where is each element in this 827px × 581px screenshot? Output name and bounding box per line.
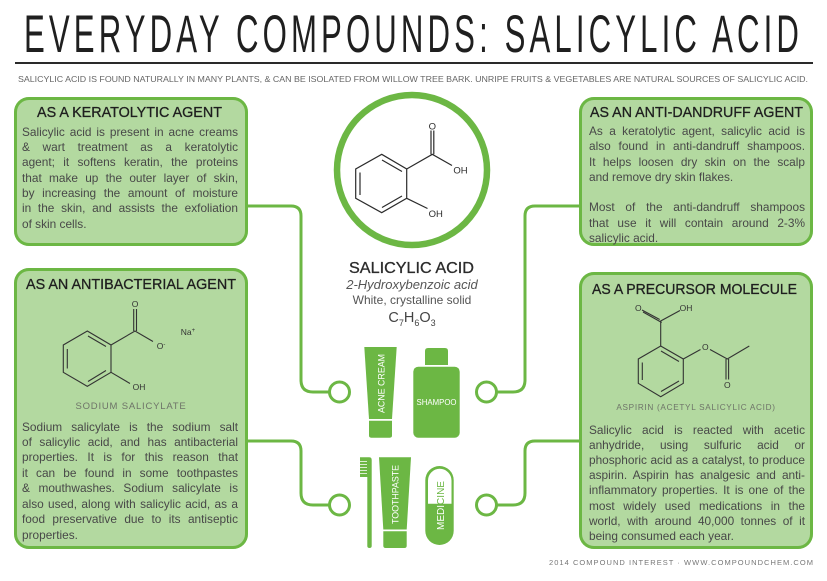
body text: keratolytic: in the skin, and assists the exfoliation: [22, 201, 238, 215]
icon: acne cream tube: [364, 347, 397, 438]
connector: antibacterial panel to toothpaste: [248, 440, 351, 516]
molecule: aspirin: O: [635, 303, 642, 313]
panel: as a precursor molecule: [579, 272, 813, 549]
heading: precursor: AS A PRECURSOR MOLECULE: [592, 281, 797, 298]
icon: medicine capsule: MEDICINE: [435, 481, 447, 530]
icon: toothbrush: [360, 457, 372, 548]
body text: precursor: most widely used medications in the: [589, 499, 805, 513]
molecule: sodium salicylate: O: [132, 299, 139, 309]
body text: keratolytic: Salicylic acid is present in acne creams: [22, 124, 238, 138]
body text: antibacterial: properties.: [22, 528, 78, 542]
body text: antibacterial: [22, 420, 238, 542]
body text: precursor: Salicylic acid is reacted with acetic: [589, 422, 805, 436]
molecule: aspirin: OH: [680, 303, 692, 313]
body text: antibacterial: it can be found in some toothpastes: [22, 466, 238, 480]
intro text: SALICYLIC ACID IS FOUND NATURALLY IN MANY PLANTS, & CAN BE ISOLATED FROM WILLOW TREE BARK. UNRIPE FRUITS & VEGETABLES ARE NATURAL SOURCES OF SALICYLIC ACID.: [18, 74, 808, 84]
icon: medicine capsule: [425, 466, 454, 545]
body text: anti-dandruff: also found in anti-dandruff shampoos.: [589, 139, 805, 153]
systematic name: 2-Hydroxybenzoic acid: [346, 277, 478, 292]
compound name block: [346, 260, 478, 328]
body text: precursor: inflammatory properties. It is one of the: [589, 483, 805, 497]
main molecule in circle: [334, 92, 490, 248]
body text: anti-dandruff: As a keratolytic agent, salicylic acid is: [589, 124, 805, 138]
caption: sodium salicylate: SODIUM SALICYLATE: [75, 401, 187, 412]
connector: precursor panel to medicine: [475, 440, 579, 516]
heading: anti-dandruff: AS AN ANTI-DANDRUFF AGENT: [590, 104, 803, 121]
body text: keratolytic: & wart treatment as a keratolytic: [22, 140, 238, 154]
body text: precursor: phosphoric acid as a catalyst, to produce: [589, 453, 805, 467]
body text: precursor: being consumed each year.: [589, 529, 734, 543]
appearance: White, crystalline solid: [353, 293, 471, 307]
molecule: aspirin: [635, 303, 750, 398]
molecule: sodium salicylate: OH: [133, 382, 145, 392]
body text: anti-dandruff: Most of the anti-dandruff shampoos: [589, 200, 805, 214]
body text: anti-dandruff: [589, 124, 805, 245]
icon: shampoo bottle: SHAMPOO: [416, 398, 456, 407]
body text: anti-dandruff: It helps loosen dry skin on the scalp: [589, 155, 805, 169]
molecule: sodium salicylate: [62, 299, 196, 392]
molecule: sodium salicylate: Na: [181, 327, 192, 337]
molecule: aspirin: O: [724, 380, 731, 390]
body text: antibacterial: also used, along with salicylic acid, as a: [22, 497, 238, 511]
icon: shampoo bottle: [413, 348, 460, 438]
body text: anti-dandruff: that use it will contain around 2-3%: [589, 216, 805, 230]
icon: toothpaste tube: [379, 457, 411, 548]
body text: keratolytic: by increasing the amount of moisture: [22, 186, 238, 200]
molecule: sodium salicylate: -: [163, 342, 165, 348]
molecule: aspirin: O: [702, 342, 709, 352]
caption: aspirin: ASPIRIN (ACETYL SALICYLIC ACID): [616, 403, 776, 412]
body text: antibacterial: food preservative due to its antiseptic: [22, 512, 238, 526]
body text: keratolytic: of skin cells.: [22, 217, 87, 231]
panel: as an antibacterial agent: [14, 268, 248, 549]
body text: precursor: [589, 422, 805, 543]
connector: anti-dandruff panel to shampoo: [475, 204, 579, 404]
body text: precursor: anhydride, using sulfuric acid or: [589, 438, 805, 452]
body text: keratolytic: [22, 124, 238, 231]
heading: antibacterial: AS AN ANTIBACTERIAL AGENT: [26, 276, 236, 293]
main molecule in circle: O: [429, 122, 436, 132]
compound name: SALICYLIC ACID: [349, 260, 474, 277]
body text: keratolytic: agent; it softens keratin, the proteins: [22, 155, 238, 169]
body text: antibacterial: of salicylic acid, and has antibacterial: [22, 435, 238, 449]
body text: keratolytic: that make up the outer layer of skin,: [22, 171, 238, 185]
panel: as an anti-dandruff agent: [579, 97, 813, 246]
main molecule in circle: OH: [453, 166, 468, 176]
main molecule in circle: OH: [429, 209, 443, 220]
body text: antibacterial: properties. It is for this reason that: [22, 450, 238, 464]
body text: antibacterial: Sodium salicylate is the sodium salt: [22, 420, 238, 434]
title rule: [15, 62, 813, 64]
panel: as a keratolytic agent: [14, 97, 248, 246]
body text: precursor: aspirin. Aspirin has analgesic and anti-: [589, 468, 805, 482]
icon: toothpaste tube: TOOTHPASTE: [390, 465, 402, 524]
body text: anti-dandruff: salicylic acid.: [589, 231, 658, 245]
body text: precursor: world, with around 40,000 tonnes of it: [589, 514, 805, 528]
molecule: sodium salicylate: O: [157, 341, 163, 351]
molecule: sodium salicylate: +: [192, 328, 196, 334]
icon: acne cream tube: ACNE CREAM: [376, 354, 388, 413]
body text: anti-dandruff: and remove dry skin flakes.: [589, 170, 733, 184]
heading: keratolytic: AS A KERATOLYTIC AGENT: [37, 104, 222, 121]
formula: C7H6O3: [388, 310, 436, 328]
body text: antibacterial: & mouthwashes. Sodium salicylate is: [22, 481, 238, 495]
connector: keratolytic panel to acne cream: [248, 204, 351, 404]
footer credit: 2014 COMPOUND INTEREST · WWW.COMPOUNDCHEM.COM: [549, 558, 813, 567]
